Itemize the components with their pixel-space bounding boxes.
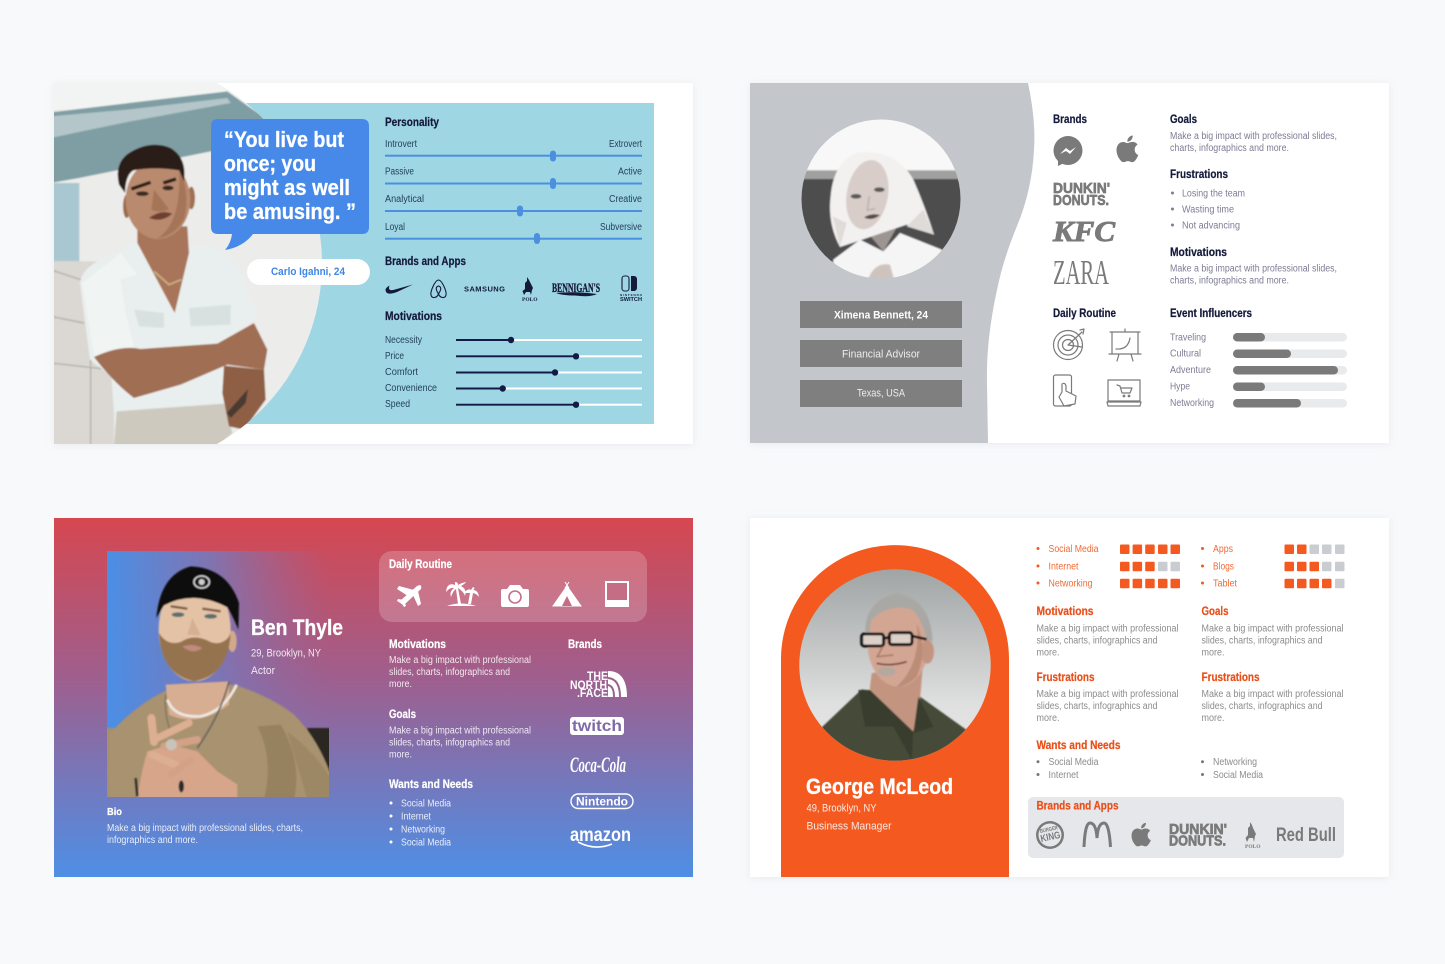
motivations: Motivations bbox=[389, 639, 446, 651]
frustrations right: Frustrations bbox=[1202, 672, 1260, 684]
logo: the north face bbox=[570, 671, 627, 700]
logo: nintendo switch bbox=[620, 276, 643, 303]
logo: polo: POLO bbox=[1245, 844, 1261, 850]
frustrations: Losing the team bbox=[1182, 189, 1245, 200]
infographic: four user persona cards bbox=[54, 83, 1385, 878]
goals: Make a big impact with professional bbox=[1202, 624, 1344, 634]
logo: burger king: KING bbox=[1040, 830, 1062, 845]
frustrations right: Make a big impact with professional bbox=[1202, 689, 1344, 700]
speech bubble quote: once; you bbox=[224, 151, 316, 176]
occupation box bbox=[800, 340, 962, 367]
motivations: slides, charts, infographics and bbox=[1036, 636, 1158, 646]
wants and needs bbox=[1036, 740, 1263, 781]
name box: Ximena Bennett, 24 bbox=[834, 310, 929, 322]
bio: infographics and more. bbox=[107, 835, 198, 846]
logo: airbnb bbox=[431, 280, 446, 298]
logo: swoosh bbox=[386, 284, 413, 294]
motivation sliders: Speed bbox=[385, 399, 410, 410]
speech bubble quote: be amusing. ” bbox=[224, 199, 356, 224]
logo: dunkin donuts: DUNKIN' bbox=[1169, 821, 1227, 838]
logo: kfc: KFC bbox=[1052, 217, 1115, 248]
motivation sliders: Price bbox=[385, 351, 404, 362]
daily routine panel: Daily Routine bbox=[389, 559, 452, 571]
brands and apps logos: Brands and Apps bbox=[385, 256, 466, 268]
personality sliders: Subversive bbox=[600, 222, 642, 233]
wants and needs: Wants and Needs bbox=[1036, 740, 1120, 752]
grey wave backdrop bbox=[750, 83, 1034, 443]
event influencer bars: Hype bbox=[1170, 382, 1190, 392]
daily routine icons: Daily Routine bbox=[1053, 308, 1116, 320]
usage ratings left: Social Media bbox=[1048, 544, 1099, 555]
goals bbox=[1202, 606, 1344, 658]
icon: palm island bbox=[446, 582, 479, 606]
usage ratings right: Blogs bbox=[1213, 561, 1234, 572]
motivations: Make a big impact with professional slides, bbox=[1170, 264, 1337, 274]
logo: nintendo switch: NINTENDO bbox=[620, 293, 643, 297]
name pill: Carlo Igahni, 24 bbox=[271, 266, 346, 278]
motivations: charts, infographics and more. bbox=[1170, 276, 1289, 286]
motivations: Motivations bbox=[1170, 247, 1227, 259]
personality sliders: Passive bbox=[385, 166, 414, 178]
goals: Goals bbox=[389, 709, 416, 721]
goals: charts, infographics and more. bbox=[1170, 143, 1289, 154]
personality sliders: Loyal bbox=[385, 222, 405, 233]
panel: Carlo Igahni persona bbox=[51, 80, 693, 446]
motivation sliders: Convenience bbox=[385, 383, 437, 394]
logo: mcdonalds bbox=[1084, 823, 1110, 847]
bio: Bio bbox=[107, 806, 122, 818]
name and role: Ben Thyle bbox=[251, 615, 343, 640]
logo: messenger bbox=[1054, 136, 1082, 166]
logo: the north face: NORTH bbox=[570, 680, 607, 692]
goals bbox=[1170, 114, 1337, 154]
icon: polaroid bbox=[605, 581, 629, 607]
goals: slides, charts, infographics and bbox=[389, 738, 510, 748]
icon: tent bbox=[553, 582, 581, 606]
personality sliders: Personality bbox=[385, 117, 440, 129]
logo: the north face: .FACE bbox=[577, 688, 608, 700]
logo: nintendo switch: SWITCH bbox=[620, 297, 642, 303]
name and role: Actor bbox=[251, 665, 275, 677]
usage ratings left: Internet bbox=[1048, 561, 1079, 572]
brands and apps strip bbox=[1028, 797, 1344, 858]
event influencer bars: Adventure bbox=[1170, 365, 1211, 376]
icon: phone and hand bbox=[1054, 375, 1076, 406]
logo: twitch: twitch bbox=[572, 718, 622, 735]
logo: apple bbox=[1132, 823, 1151, 846]
name and role: 29, Brooklyn, NY bbox=[251, 648, 322, 660]
frustrations right: more. bbox=[1202, 713, 1224, 724]
speech bubble quote: “You live but bbox=[224, 127, 344, 152]
logo: bennigan's bbox=[552, 281, 600, 296]
goals: Make a big impact with professional bbox=[389, 726, 531, 736]
wants and needs: Networking bbox=[401, 824, 445, 836]
name pill bbox=[247, 259, 370, 285]
logo: dunkin donuts: DONUTS. bbox=[1053, 192, 1109, 209]
bio: Make a big impact with professional slides, charts, bbox=[107, 823, 303, 834]
speech bubble quote bbox=[211, 119, 369, 250]
icon: laptop cart bbox=[1107, 380, 1141, 406]
frustrations left: Frustrations bbox=[1036, 672, 1094, 684]
goals bbox=[389, 709, 531, 760]
event influencer bars: Event Influencers bbox=[1170, 308, 1252, 320]
motivations: Make a big impact with professional bbox=[1036, 624, 1178, 634]
personality sliders: Introvert bbox=[385, 139, 417, 150]
usage ratings right bbox=[1201, 544, 1344, 590]
motivation sliders: Motivations bbox=[385, 311, 442, 323]
photo: George McLeod bbox=[797, 567, 993, 765]
logo: apple bbox=[1117, 135, 1138, 162]
logo: samsung: SAMSUNG bbox=[464, 284, 505, 294]
frustrations left bbox=[1036, 672, 1178, 724]
name and role bbox=[806, 774, 953, 832]
blue backdrop bbox=[214, 103, 654, 424]
logo: burger king: BURGER bbox=[1040, 825, 1058, 835]
wants and needs: Internet bbox=[401, 812, 431, 822]
photo: Ximena Bennett bbox=[802, 120, 960, 278]
motivations bbox=[389, 639, 531, 690]
logo: dunkin donuts bbox=[1053, 180, 1110, 209]
event influencer bars: Networking bbox=[1170, 398, 1214, 409]
brands: Brands bbox=[1053, 114, 1087, 126]
name and role bbox=[251, 615, 343, 677]
wants and needs: Social Media bbox=[1213, 770, 1263, 781]
usage ratings right: Apps bbox=[1213, 544, 1233, 555]
frustrations: Wasting time bbox=[1182, 205, 1234, 216]
motivations: slides, charts, infographics and bbox=[389, 667, 510, 678]
logo: red bull: Red Bull bbox=[1276, 825, 1336, 846]
photo: Carlo Igahni bbox=[51, 80, 331, 446]
name box bbox=[800, 301, 962, 328]
frustrations left: slides, charts, infographics and bbox=[1036, 701, 1158, 712]
usage ratings left bbox=[1036, 544, 1180, 590]
frustrations right: slides, charts, infographics and bbox=[1202, 701, 1322, 712]
motivations: more. bbox=[389, 679, 412, 690]
location box bbox=[800, 380, 962, 407]
icon: plane bbox=[397, 585, 421, 607]
panel: Ximena Bennett persona bbox=[750, 83, 1389, 443]
logo: nintendo bbox=[571, 794, 633, 808]
usage ratings left: Networking bbox=[1048, 578, 1092, 590]
logo: zara: ZARA bbox=[1053, 253, 1109, 292]
personality sliders: Extrovert bbox=[609, 139, 642, 150]
motivation sliders bbox=[385, 311, 642, 410]
bio bbox=[107, 806, 303, 846]
daily routine panel bbox=[379, 551, 647, 622]
logo: polo bbox=[1245, 822, 1261, 850]
logo: polo: POLO bbox=[522, 297, 538, 303]
photo: Ben Thyle bbox=[104, 551, 331, 800]
logo: dunkin donuts bbox=[1169, 821, 1227, 850]
logo: dunkin donuts: DUNKIN' bbox=[1053, 180, 1110, 197]
frustrations: Frustrations bbox=[1170, 169, 1228, 181]
logo: polo bbox=[522, 277, 538, 303]
motivations: more. bbox=[1036, 648, 1060, 658]
frustrations left: Make a big impact with professional bbox=[1036, 689, 1178, 700]
motivation sliders: Necessity bbox=[385, 335, 422, 346]
event influencer bars: Traveling bbox=[1170, 332, 1206, 344]
goals: slides, charts, infographics and bbox=[1202, 636, 1322, 646]
logo: the north face: THE bbox=[587, 671, 608, 683]
goals: Make a big impact with professional slides, bbox=[1170, 131, 1337, 142]
logo: dunkin donuts: DONUTS. bbox=[1169, 832, 1226, 850]
event influencer bars bbox=[1170, 308, 1347, 409]
name and role: Business Manager bbox=[806, 820, 892, 832]
event influencer bars: Cultural bbox=[1170, 348, 1201, 360]
personality sliders: Analytical bbox=[385, 194, 424, 205]
motivations bbox=[1170, 247, 1337, 286]
goals: more. bbox=[1202, 648, 1224, 658]
wants and needs: Networking bbox=[1213, 757, 1257, 768]
frustrations bbox=[1170, 169, 1245, 232]
logo: amazon: amazon bbox=[570, 825, 631, 846]
frustrations left: more. bbox=[1036, 713, 1060, 724]
panel: Ben Thyle persona bbox=[54, 518, 693, 877]
wants and needs: Wants and Needs bbox=[389, 779, 473, 791]
brands and apps strip: Brands and Apps bbox=[1036, 800, 1118, 812]
motivations bbox=[1036, 606, 1178, 658]
wants and needs: Internet bbox=[1048, 770, 1079, 781]
motivations: Make a big impact with professional bbox=[389, 655, 531, 666]
frustrations: Not advancing bbox=[1182, 221, 1240, 232]
brands column bbox=[568, 639, 633, 847]
brands and apps logos bbox=[385, 256, 643, 303]
orange arch bbox=[781, 545, 1009, 877]
icon: target bbox=[1054, 329, 1084, 360]
logo: coca-cola: Coca-Cola bbox=[570, 752, 626, 777]
goals: Goals bbox=[1170, 114, 1197, 126]
wants and needs: Social Media bbox=[401, 798, 451, 810]
panel: George McLeod persona bbox=[750, 518, 1389, 877]
personality sliders: Creative bbox=[609, 194, 642, 205]
speech bubble quote: might as well bbox=[224, 175, 350, 200]
motivations: Motivations bbox=[1036, 606, 1094, 618]
brands bbox=[1052, 114, 1138, 292]
frustrations right bbox=[1202, 672, 1344, 724]
logo: bennigan's: BENNIGAN'S bbox=[552, 281, 600, 295]
motivation sliders: Comfort bbox=[385, 367, 418, 378]
icon: camera bbox=[501, 585, 529, 607]
personality sliders bbox=[385, 117, 642, 244]
goals: more. bbox=[389, 750, 412, 760]
goals: Goals bbox=[1202, 606, 1228, 618]
wants and needs: Social Media bbox=[401, 838, 451, 848]
wants and needs bbox=[389, 779, 473, 848]
name and role: 49, Brooklyn, NY bbox=[806, 803, 877, 815]
personality sliders: Active bbox=[618, 166, 642, 178]
usage ratings right: Tablet bbox=[1213, 578, 1237, 590]
wants and needs: Social Media bbox=[1048, 757, 1099, 768]
brands column: Brands bbox=[568, 639, 602, 651]
location box: Texas, USA bbox=[857, 388, 906, 400]
occupation box: Financial Advisor bbox=[842, 348, 920, 360]
logo: nintendo: Nintendo bbox=[576, 796, 628, 808]
icon: presentation board bbox=[1109, 329, 1141, 361]
logo: burger king bbox=[1036, 821, 1064, 849]
name and role: George McLeod bbox=[806, 774, 953, 799]
daily routine icons bbox=[1053, 308, 1141, 406]
